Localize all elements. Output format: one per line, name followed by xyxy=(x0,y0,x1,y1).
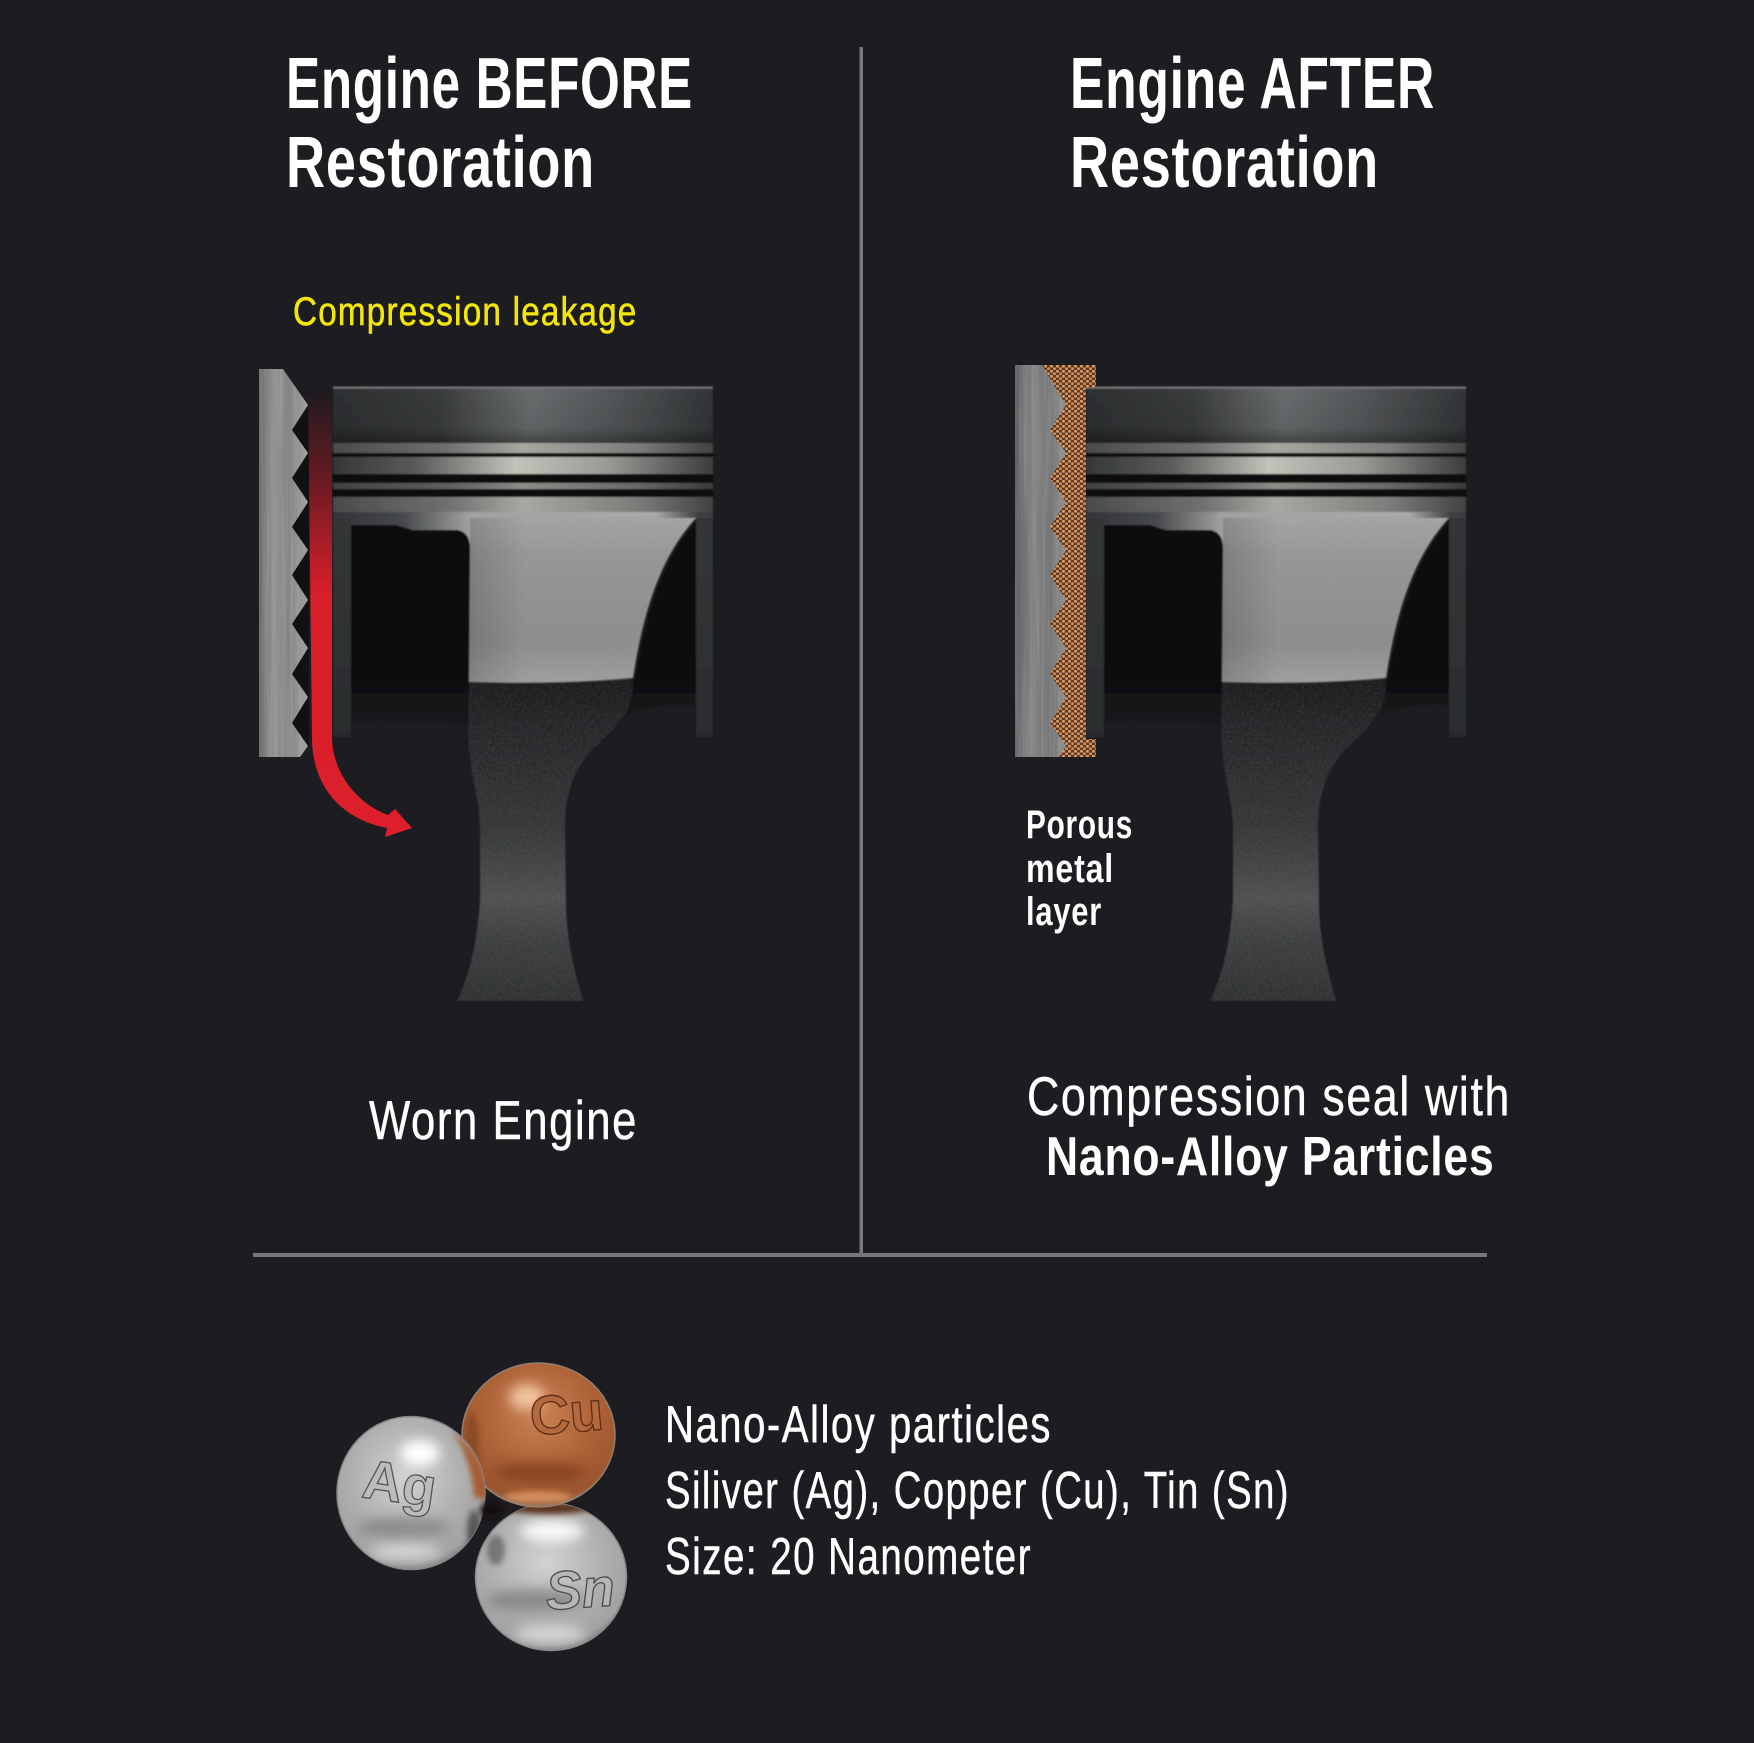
icon: metal spheres xyxy=(337,1363,626,1650)
horizontal divider xyxy=(253,1253,1487,1257)
label: porous metal layer: Porous xyxy=(1026,803,1133,847)
heading: engine before restoration: Engine BEFORE xyxy=(286,44,693,124)
caption: worn engine: Worn Engine xyxy=(369,1089,638,1151)
cylinder wall restored xyxy=(1015,365,1066,757)
label: Sn: Sn xyxy=(544,1557,617,1622)
caption: compression seal: Compression seal with xyxy=(1027,1065,1511,1127)
sphere contact shadow xyxy=(480,1502,502,1518)
label: compression leakage: Compression leakage xyxy=(293,290,638,334)
caption: compression seal: Nano-Alloy Particles xyxy=(1046,1125,1494,1187)
heading: engine after restoration xyxy=(1070,44,1435,203)
piston: before xyxy=(333,386,713,1001)
panel: nano-alloy particles xyxy=(337,1363,1290,1650)
text: particle details: Nano-Alloy particles xyxy=(665,1396,1052,1454)
label: porous metal layer: metal xyxy=(1026,847,1114,891)
heading: engine before restoration xyxy=(286,44,693,203)
text: particle details: Size: 20 Nanometer xyxy=(665,1528,1032,1586)
arrow: compression leakage xyxy=(308,392,412,837)
piston: after xyxy=(1086,386,1466,1001)
label: Ag: Ag xyxy=(359,1447,440,1519)
label: porous metal layer xyxy=(1026,803,1133,934)
text: particle details: Siliver (Ag), Copper (Cu), Tin (Sn) xyxy=(665,1462,1290,1520)
panel: before restoration xyxy=(259,44,713,1151)
cylinder wall worn xyxy=(259,369,308,757)
sphere: tin xyxy=(476,1502,626,1650)
notch shadow xyxy=(290,405,309,746)
panel: after restoration xyxy=(1015,44,1511,1187)
sphere: copper xyxy=(462,1363,615,1507)
label: Cu: Cu xyxy=(527,1379,606,1448)
porous metal layer xyxy=(1040,365,1096,757)
heading: engine after restoration: Restoration xyxy=(1070,123,1379,203)
heading: engine after restoration: Engine AFTER xyxy=(1070,44,1435,124)
vertical divider xyxy=(860,47,863,1255)
heading: engine before restoration: Restoration xyxy=(286,123,595,203)
sphere: silver xyxy=(337,1416,488,1570)
label: porous metal layer: layer xyxy=(1026,890,1102,934)
caption: compression seal xyxy=(1027,1065,1511,1187)
text: particle details xyxy=(665,1396,1290,1586)
